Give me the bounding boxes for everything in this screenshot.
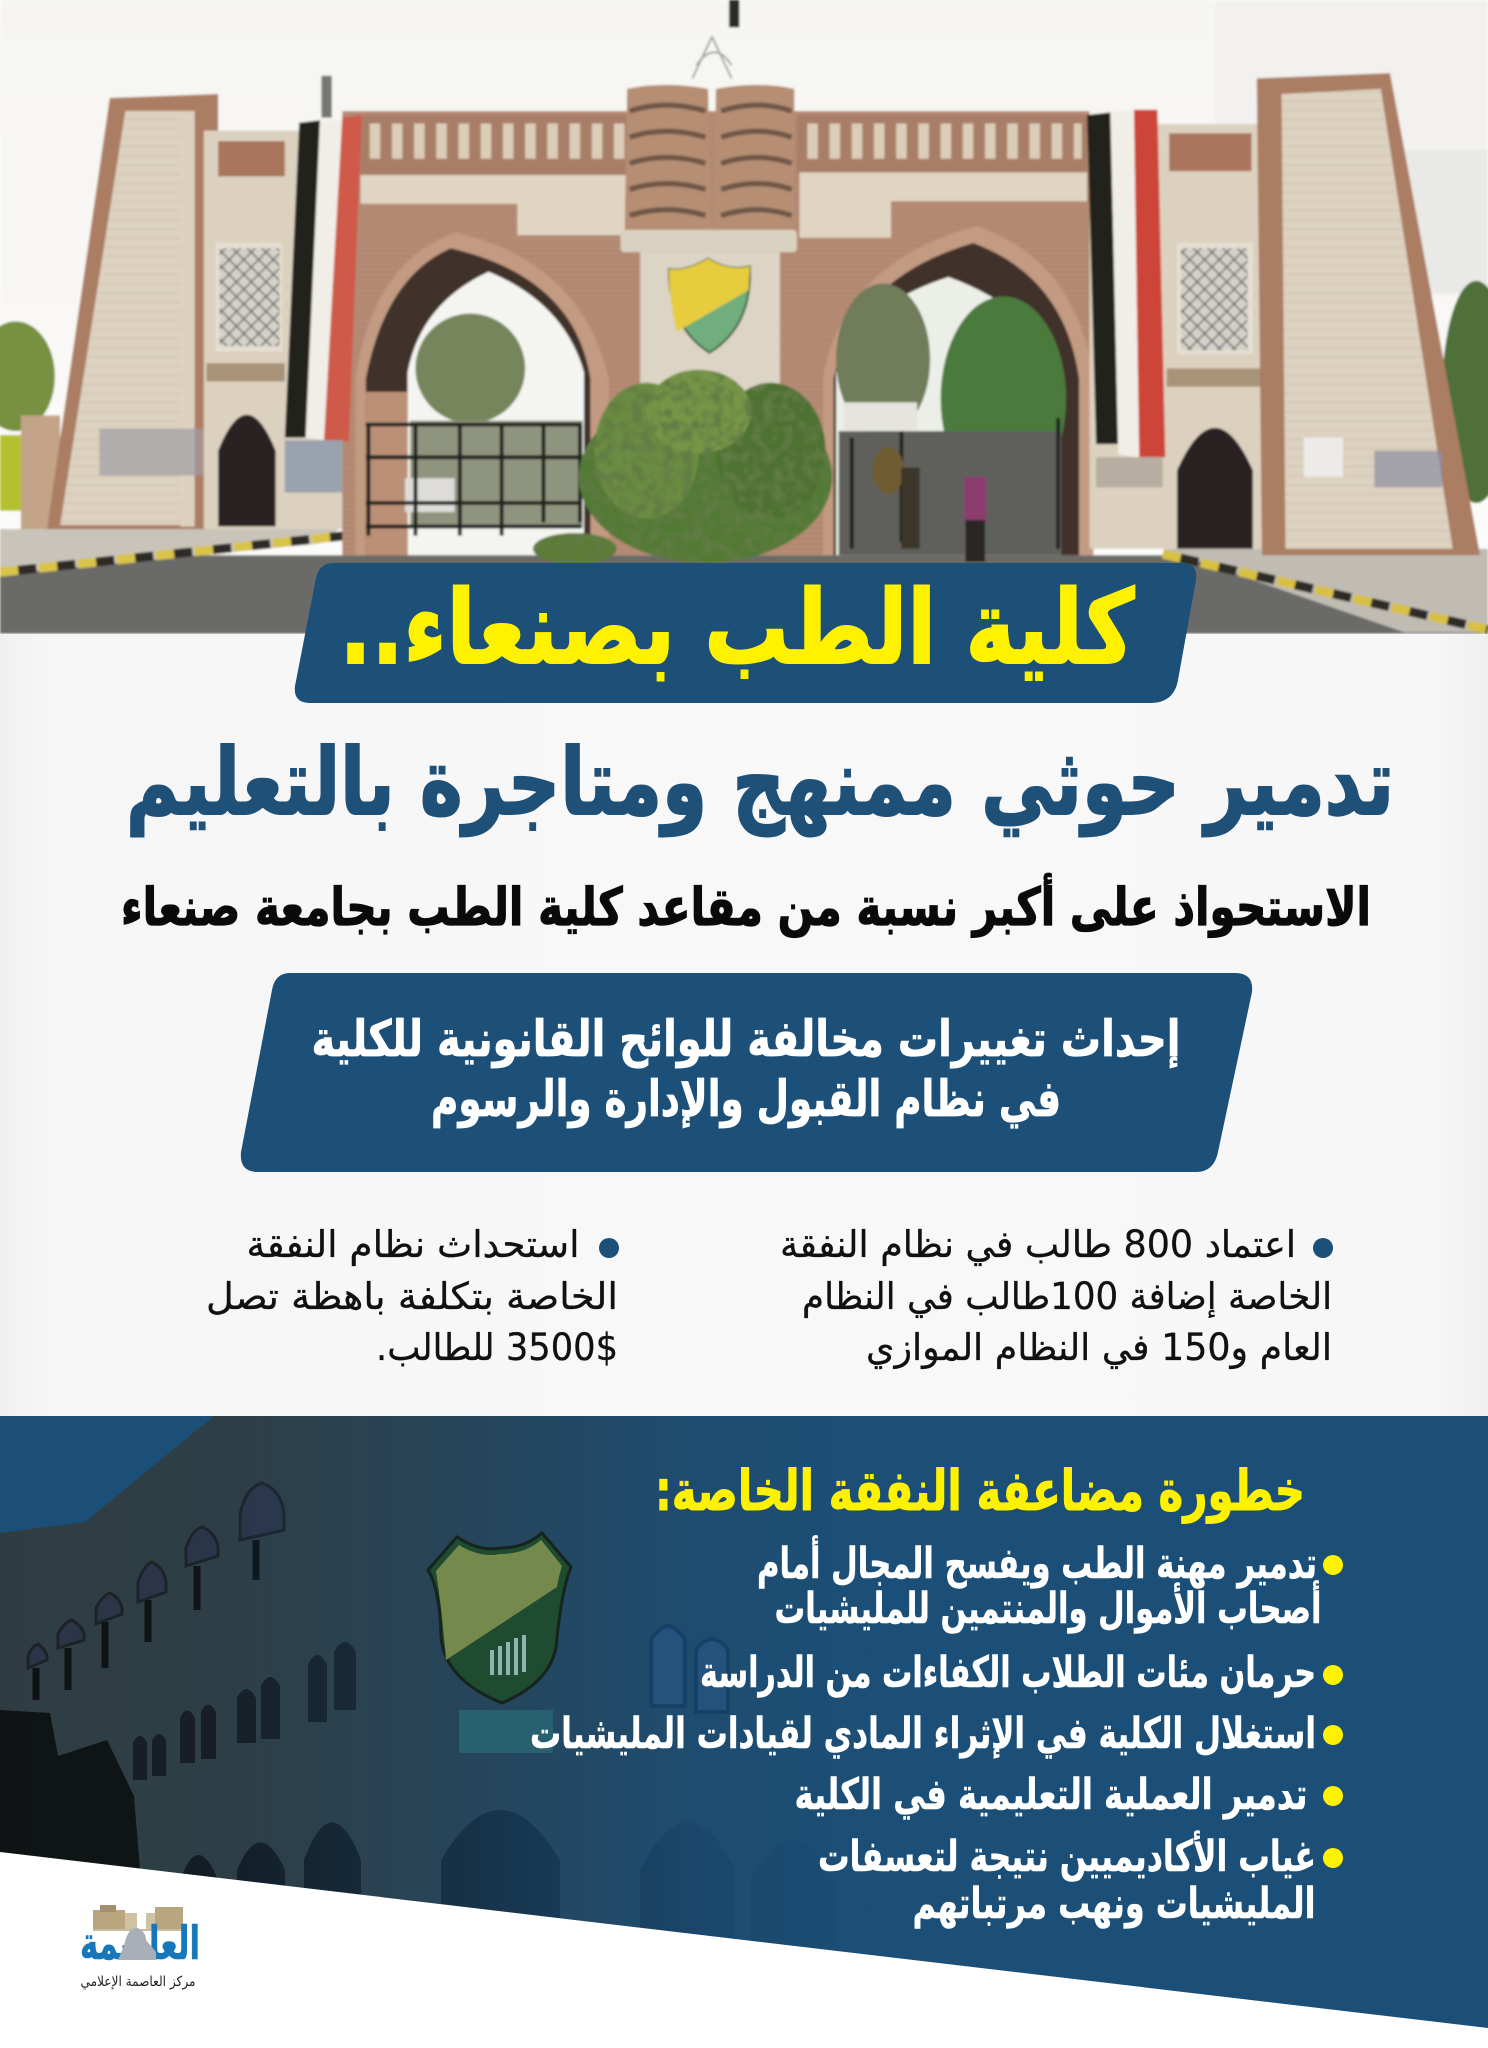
lower windows [133, 1642, 356, 1780]
wall plaque [459, 1710, 553, 1753]
white diagonal footer [0, 1852, 1488, 2048]
left bullet block [206, 1223, 619, 1369]
left arch [355, 233, 609, 555]
item 5: غياب الأكاديميين نتيجة لتعسفات [818, 1830, 1316, 1882]
left bullet block: الخاصة بتكلفة باهظة تصل [206, 1275, 618, 1318]
central pillar with crest [640, 252, 780, 415]
item 5: المليشيات ونهب مرتباتهم [912, 1879, 1316, 1929]
item 5 [818, 1830, 1343, 1929]
box line 1: إحداث تغييرات مخالفة للوائح القانونية للكلية [312, 1010, 1180, 1069]
upper windows [28, 1483, 284, 1668]
fade to blue [0, 1416, 1488, 2048]
bottom panel: dark building photo [0, 1416, 1488, 2048]
photo: university gate [0, 0, 1488, 634]
right bullet block: الخاصة إضافة 100طالب في النظام [802, 1275, 1332, 1318]
logo [80, 1905, 200, 1990]
bullet dot [1313, 1238, 1333, 1258]
ground-floor arches [180, 1810, 835, 2000]
flagpole [729, 0, 739, 27]
left wall [204, 131, 361, 529]
left bullet block: 3500$ للطالب. [376, 1326, 618, 1369]
right wall [1090, 124, 1265, 549]
right bullet block [780, 1223, 1333, 1369]
box line 2: في نظام القبول والإدارة والرسوم [431, 1070, 1061, 1129]
item 4: تدمير العملية التعليمية في الكلية [794, 1770, 1308, 1820]
title text: كلية الطب بصنعاء.. [340, 569, 1135, 688]
right bullet block: العام و150 في النظام الموازي [866, 1326, 1332, 1369]
central book sculpture [624, 85, 712, 251]
central bush [533, 370, 832, 564]
icon: old city houses [93, 1905, 183, 1931]
right flag [1087, 112, 1118, 444]
danger list [530, 1535, 1343, 1929]
left bullet block: استحداث نظام النفقة [246, 1223, 580, 1266]
crest on wall [428, 1533, 571, 1703]
right tower [1257, 73, 1480, 555]
bullet dot [599, 1238, 619, 1258]
title banner [295, 563, 1196, 703]
blue info box [241, 973, 1252, 1172]
logo emblem [118, 1928, 156, 1960]
left tower [47, 94, 218, 529]
item 1 [757, 1535, 1343, 1634]
side windows [651, 1626, 685, 1706]
building silhouette [0, 1416, 1000, 2048]
right bullet block: اعتماد 800 طالب في نظام النفقة [780, 1223, 1296, 1266]
pedestrians [964, 477, 986, 523]
right arch [823, 226, 1093, 555]
central wall [342, 111, 1090, 555]
left flag [285, 120, 320, 438]
dark tree [0, 1710, 140, 1870]
road [0, 555, 1488, 634]
middle panel background [0, 634, 1488, 1416]
gates [366, 418, 1058, 549]
logo caption: مركز العاصمة الإعلامي [80, 1974, 196, 1990]
logo wordmark: العاصمة [80, 1916, 200, 1970]
trees at edges [0, 321, 55, 431]
